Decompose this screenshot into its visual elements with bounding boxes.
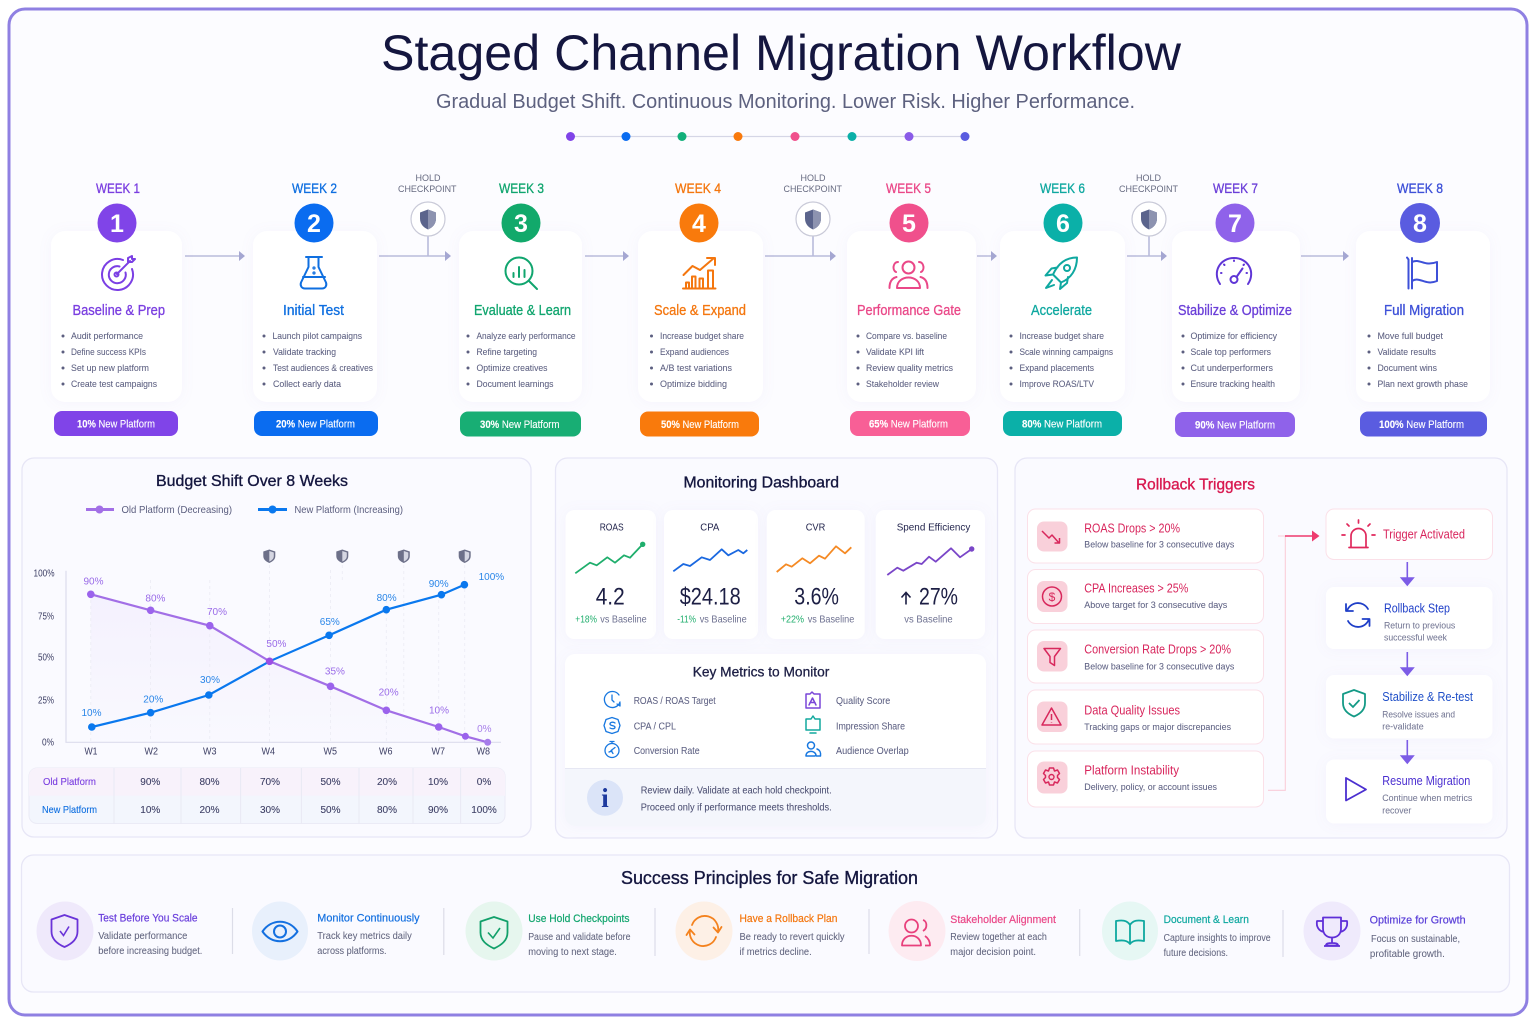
info callout: Review daily. Validate at each hold checkpoint.: [641, 785, 832, 796]
principle: have a rollback plan: [676, 902, 845, 960]
hold checkpoint 1: HOLD: [416, 173, 441, 183]
week 3 column: 30% New Platform: [480, 419, 560, 431]
metric card: spend efficiency: 27%: [919, 584, 958, 610]
icon: flag: [1407, 258, 1437, 288]
trigger: CPA increases: [1028, 570, 1264, 624]
principle: document and learn: future decisions.: [1164, 948, 1228, 959]
principle: document and learn: [1102, 902, 1271, 960]
metric icons right: [806, 692, 821, 756]
week 4 column: WEEK 4: [675, 180, 721, 196]
trigger: CPA increases: Above target for 3 consecutive days: [1084, 600, 1227, 611]
trigger: platform instability: Platform Instability: [1084, 763, 1180, 777]
line chart: W4: [262, 746, 275, 758]
week 3 column: 3: [514, 210, 528, 238]
principle: have a rollback plan: Be ready to revert quickly: [740, 932, 845, 943]
new platform series: 30%: [200, 675, 220, 686]
metric card: CPA: $24.18: [680, 584, 741, 610]
week 3 column: WEEK 3: [499, 180, 544, 196]
step: rollback: Return to previous: [1384, 620, 1455, 631]
metric card: CPA: CPA: [700, 522, 719, 534]
step: stabilize: Resolve issues and: [1382, 710, 1455, 721]
week 6 column: 80% New Platform: [1022, 418, 1102, 430]
hold checkpoint 2: HOLD: [800, 173, 826, 183]
line chart: 0%: [42, 738, 54, 748]
hold checkpoint 2: CHECKPOINT: [784, 184, 842, 194]
principle: stakeholder alignment: Review together at each: [950, 932, 1047, 943]
metric card: ROAS: vs Baseline: [600, 615, 647, 626]
new platform series: 65%: [320, 617, 340, 628]
principle: optimize for growth: Optimize for Growth: [1370, 914, 1466, 926]
metric card: spend efficiency: vs Baseline: [904, 615, 953, 626]
principle: stakeholder alignment: Stakeholder Alignment: [950, 914, 1056, 926]
week 1 column: Audit performance: [71, 330, 143, 341]
trigger: ROAS drops: [1028, 509, 1264, 563]
week 5 column: 5: [902, 210, 916, 238]
legend: New Platform (Increasing): [294, 505, 403, 516]
icon: rocket: [1046, 258, 1077, 289]
week 6 column: [1000, 180, 1125, 436]
week 7 column: Ensure tracking health: [1190, 378, 1275, 389]
week 1 column: Define success KPIs: [71, 346, 146, 357]
principle: optimize for growth: [1304, 902, 1466, 960]
principle: test before you scale: Validate performance: [98, 931, 188, 942]
line chart: 50%: [38, 652, 54, 664]
old platform series: 35%: [325, 666, 345, 678]
allocation table: 50%: [320, 805, 341, 816]
week 3 column: Document learnings: [476, 378, 554, 389]
step: rollback: successful week: [1384, 632, 1447, 643]
line chart: 100%: [34, 568, 55, 580]
step: rollback: [1326, 587, 1492, 649]
allocation table: 80%: [199, 777, 220, 788]
allocation table: 90%: [140, 777, 160, 788]
week 6 column: Increase budget share: [1020, 330, 1104, 341]
week 6 column: Accelerate: [1031, 303, 1092, 319]
week 6 column: WEEK 6: [1040, 180, 1085, 196]
week 3 column: Refine targeting: [476, 346, 537, 357]
allocation table: Old Platform: [43, 776, 96, 788]
principle: stakeholder alignment: major decision point.: [950, 947, 1036, 958]
week 8 column: Plan next growth phase: [1378, 378, 1468, 389]
new platform series: 90%: [429, 579, 449, 590]
allocation table: 10%: [140, 805, 160, 816]
week 7 column: [1172, 180, 1300, 437]
key metrics card: Quality Score: [836, 696, 891, 707]
week 2 column: Test audiences & creatives: [273, 362, 373, 373]
line chart: W7: [432, 746, 445, 758]
allocation table: 70%: [260, 777, 280, 788]
subtitle: Gradual Budget Shift. Continuous Monitoring. Lower Risk. Higher Performance.: [436, 91, 1135, 113]
metric icons left: [604, 692, 620, 758]
week 7 column: WEEK 7: [1213, 180, 1258, 196]
week 1 column: Baseline & Prep: [72, 303, 165, 319]
old platform series: [83, 576, 492, 746]
week 2 column: WEEK 2: [292, 180, 337, 196]
week 3 column: Analyze early performance: [476, 330, 576, 341]
principle: stakeholder alignment: [888, 901, 1056, 961]
week 7 column: Cut underperformers: [1190, 362, 1273, 373]
principle: have a rollback plan: Have a Rollback Plan: [740, 913, 837, 925]
trigger: conversion rate drops: Conversion Rate Drops > 20%: [1084, 643, 1231, 657]
allocation table: New Platform: [42, 804, 97, 816]
week 6 column: Improve ROAS/LTV: [1020, 378, 1095, 389]
week 5 column: Review quality metrics: [866, 362, 953, 373]
week 2 column: Validate tracking: [273, 346, 336, 357]
line chart: W8: [476, 746, 490, 758]
allocation table: 20%: [377, 777, 397, 788]
principle: optimize for growth: profitable growth.: [1370, 949, 1445, 960]
allocation table: 0%: [477, 777, 491, 788]
week 2 column: Launch pilot campaigns: [272, 330, 362, 341]
week 1 column: WEEK 1: [96, 180, 140, 196]
timeline dots: [566, 132, 970, 141]
week 1 column: Set up new platform: [71, 362, 149, 373]
week 2 column: 20% New Platform: [276, 418, 355, 430]
week 6 column: 6: [1056, 210, 1070, 238]
week 4 column: Scale & Expand: [654, 303, 746, 319]
week 1 column: 1: [110, 210, 124, 238]
allocation table: 30%: [260, 805, 280, 816]
info callout: [587, 780, 832, 816]
info callout: Proceed only if performance meets thresholds.: [641, 803, 832, 814]
metric card: CVR: [767, 510, 865, 639]
week 1 column: [51, 180, 182, 436]
principle: have a rollback plan: if metrics decline.: [740, 947, 812, 958]
week 4 column: A/B test variations: [660, 362, 732, 373]
trigger: ROAS drops: Below baseline for 3 consecutive days: [1084, 540, 1234, 551]
new platform series: 10%: [81, 708, 102, 719]
line chart: 25%: [38, 696, 54, 706]
hold checkpoint 3: HOLD: [1136, 173, 1161, 183]
principle: use hold checkpoints: Use Hold Checkpoints: [528, 913, 630, 925]
step: stabilize: re-validate: [1382, 722, 1424, 733]
line chart: W5: [324, 746, 337, 758]
week 7 column: Optimize for efficiency: [1190, 330, 1277, 341]
trigger: data quality: Tracking gaps or major discrepancies: [1084, 722, 1231, 733]
principle: use hold checkpoints: [466, 902, 631, 960]
metric card: CVR: +22%: [781, 615, 804, 626]
key metrics card: Impression Share: [836, 722, 905, 732]
principle: monitor continuously: Monitor Continuously: [317, 913, 420, 925]
week 4 column: 50% New Platform: [661, 419, 739, 431]
panel: monitoring dashboard: [556, 458, 998, 838]
step: stabilize: Stabilize & Re-test: [1382, 690, 1473, 704]
trigger: platform instability: [1028, 751, 1264, 807]
info callout: i: [601, 783, 609, 813]
old platform series: 10%: [429, 706, 449, 716]
step: trigger activated: Trigger Activated: [1383, 527, 1465, 541]
allocation table: 80%: [377, 805, 397, 816]
hold checkpoint 2: [784, 173, 842, 236]
trigger: CPA increases: CPA Increases > 25%: [1084, 582, 1188, 596]
principle: document and learn: Document & Learn: [1164, 914, 1249, 926]
icon: magnifier chart: [506, 258, 537, 289]
week 5 column: Compare vs. baseline: [866, 330, 947, 341]
panel: budget shift chart: [22, 458, 531, 837]
week 6 column: Scale winning campaigns: [1020, 346, 1113, 357]
old platform series: 70%: [207, 607, 227, 618]
principle: test before you scale: [36, 902, 202, 960]
hold checkpoint 3: [1119, 173, 1178, 236]
metric card: CPA: vs Baseline: [700, 615, 747, 626]
principle: document and learn: Capture insights to improve: [1164, 933, 1271, 944]
week 3 column: [459, 180, 582, 436]
new platform series: 80%: [377, 593, 397, 604]
week 7 column: 90% New Platform: [1195, 420, 1275, 432]
metric card: CPA: -11%: [677, 615, 696, 626]
allocation table: 20%: [199, 805, 220, 816]
checkpoint shields: [263, 550, 471, 563]
step: rollback: Rollback Step: [1384, 601, 1450, 615]
trigger: CPA increases: $: [1049, 590, 1056, 604]
legend: [86, 505, 403, 516]
metric card: ROAS: +18%: [575, 615, 597, 626]
principle: monitor continuously: Track key metrics daily: [317, 931, 412, 942]
hold checkpoint 3: CHECKPOINT: [1119, 184, 1178, 194]
dashboard heading: Monitoring Dashboard: [684, 474, 839, 492]
metric card: CVR: vs Baseline: [808, 615, 855, 626]
week 8 column: 8: [1413, 210, 1427, 238]
principle: test before you scale: before increasing budget.: [98, 946, 202, 957]
title: Staged Channel Migration Workflow: [381, 25, 1182, 81]
new platform series: 100%: [479, 572, 504, 583]
trigger: data quality: [1028, 690, 1264, 744]
step: resume: recover: [1382, 805, 1412, 816]
line chart: W6: [379, 746, 393, 758]
principle: optimize for growth: Focus on sustainable,: [1371, 934, 1460, 945]
panel: success principles: [22, 855, 1510, 992]
key metrics card: CPA / CPL: [634, 722, 676, 732]
line chart: W3: [203, 746, 217, 758]
line chart: W1: [84, 746, 98, 758]
step: trigger activated: [1326, 509, 1492, 560]
trigger: ROAS drops: ROAS Drops > 20%: [1084, 522, 1180, 536]
step: resume: [1326, 760, 1492, 824]
week 8 column: Validate results: [1378, 346, 1436, 357]
panel: rollback triggers: [1015, 458, 1507, 838]
week 1 column: Create test campaigns: [71, 378, 157, 389]
allocation table: 100%: [471, 805, 497, 816]
hold checkpoint 1: CHECKPOINT: [398, 184, 457, 194]
week 8 column: 100% New Platform: [1379, 419, 1464, 431]
line chart: W2: [144, 746, 158, 758]
week 5 column: [847, 180, 976, 436]
week 8 column: [1356, 180, 1490, 436]
connector to trigger: [1268, 530, 1320, 790]
trigger: platform instability: Delivery, policy, or account issues: [1084, 782, 1217, 793]
old platform series: 80%: [145, 594, 166, 604]
week 6 column: Expand placements: [1020, 362, 1094, 373]
week 8 column: Move full budget: [1378, 330, 1443, 341]
line chart: 75%: [38, 612, 54, 622]
metric card: CPA: [664, 510, 758, 639]
trigger: conversion rate drops: [1028, 630, 1264, 683]
icon: flask: [301, 257, 326, 288]
week 4 column: Expand audiences: [660, 346, 729, 357]
principle: monitor continuously: [252, 902, 420, 960]
trigger: data quality: Data Quality Issues: [1084, 703, 1180, 717]
week 5 column: Validate KPI lift: [866, 346, 924, 357]
week 4 column: 4: [692, 210, 706, 238]
week 8 column: Document wins: [1378, 362, 1437, 373]
icon: growth chart: [683, 258, 716, 288]
allocation table: 10%: [428, 777, 448, 788]
week 5 column: Performance Gate: [857, 303, 961, 319]
flow arrows between weeks: [185, 236, 1349, 261]
week 5 column: Stakeholder review: [866, 378, 939, 389]
rollback heading: Rollback Triggers: [1136, 476, 1255, 493]
allocation table: 50%: [320, 777, 341, 788]
step arrows: [1402, 562, 1413, 763]
key metrics card: Conversion Rate: [634, 746, 700, 757]
step: resume: Resume Migration: [1382, 774, 1470, 788]
metric card: CVR: 3.6%: [794, 584, 839, 610]
new platform series: [81, 572, 504, 731]
key metrics card: Audience Overlap: [836, 746, 909, 757]
allocation table: 90%: [428, 805, 448, 816]
principle: test before you scale: Test Before You Scale: [98, 913, 198, 925]
new platform series: 20%: [143, 694, 163, 706]
principle: monitor continuously: across platforms.: [317, 946, 387, 957]
week 3 column: Optimize creatives: [476, 362, 548, 373]
chart heading: Budget Shift Over 8 Weeks: [156, 473, 348, 490]
week 2 column: 2: [307, 210, 321, 238]
week 7 column: Stabilize & Optimize: [1178, 303, 1292, 319]
week 8 column: WEEK 8: [1397, 180, 1443, 196]
key metrics heading: Key Metrics to Monitor: [693, 664, 830, 680]
week 8 column: Full Migration: [1384, 303, 1464, 319]
trigger: conversion rate drops: Below baseline for 3 consecutive days: [1084, 661, 1234, 672]
week 7 column: Scale top performers: [1190, 346, 1271, 357]
line chart: [34, 550, 504, 758]
key metrics card: [565, 654, 986, 826]
step: resume: Continue when metrics: [1382, 793, 1472, 804]
week 5 column: WEEK 5: [886, 180, 931, 196]
old platform series: 50%: [266, 639, 287, 650]
week 2 column: [253, 180, 378, 436]
week 5 column: 65% New Platform: [869, 418, 948, 430]
old platform series: 0%: [477, 724, 492, 735]
hold checkpoint 1: [398, 173, 457, 236]
principles heading: Success Principles for Safe Migration: [621, 868, 918, 888]
principle: use hold checkpoints: moving to next stage.: [528, 947, 617, 958]
metric card: ROAS: 4.2: [596, 584, 625, 610]
week 4 column: Increase budget share: [660, 330, 744, 341]
old platform series: 90%: [83, 576, 104, 588]
allocation table: [29, 768, 505, 824]
metric card: ROAS: ROAS: [600, 522, 624, 534]
week 4 column: [638, 180, 763, 436]
key metrics card: ROAS / ROAS Target: [634, 696, 716, 707]
week 1 column: 10% New Platform: [77, 418, 155, 430]
old platform series: 20%: [379, 688, 399, 698]
icon: target: [102, 256, 135, 290]
metric card: CVR: CVR: [806, 522, 826, 534]
week 2 column: Collect early data: [273, 378, 342, 389]
metric card: spend efficiency: [876, 510, 985, 639]
metric card: ROAS: [566, 510, 656, 639]
week 4 column: Optimize bidding: [660, 378, 727, 389]
week 7 column: 7: [1228, 210, 1242, 238]
icon: people: [890, 262, 928, 288]
step: stabilize: [1326, 675, 1492, 738]
principle: use hold checkpoints: Pause and validate before: [528, 932, 631, 943]
legend: Old Platform (Decreasing): [122, 505, 232, 516]
metric card: spend efficiency: Spend Efficiency: [897, 522, 971, 534]
week 3 column: Evaluate & Learn: [474, 303, 571, 319]
icon: gauge: [1217, 258, 1251, 284]
week 2 column: Initial Test: [283, 303, 344, 319]
